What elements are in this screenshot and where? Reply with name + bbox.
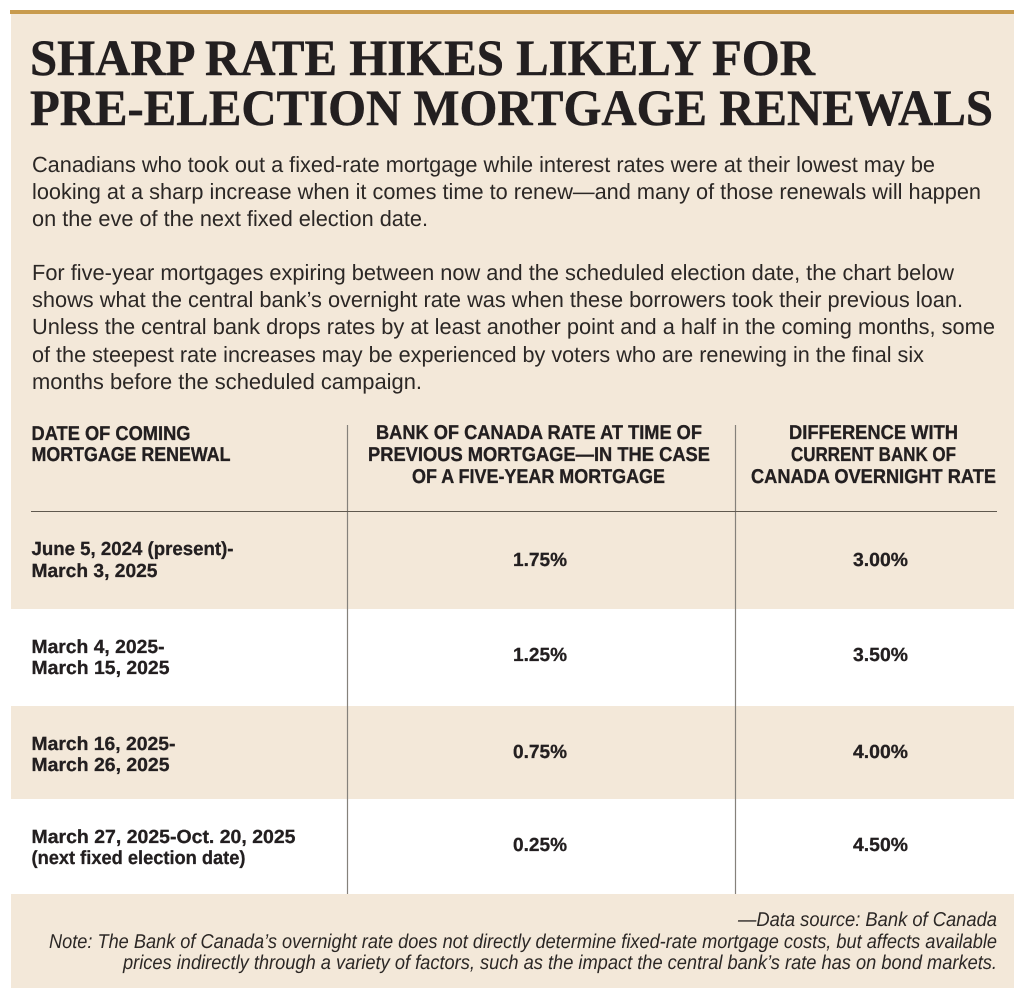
row 1	[32, 539, 908, 582]
text block: intro paragraph: on the eve of the next fixed election date.	[32, 206, 428, 231]
title: SHARP RATE HIKES LIKELY FOR	[30, 31, 816, 87]
footer: source and note	[49, 909, 997, 974]
column heading: renewal date: MORTGAGE RENEWAL	[32, 444, 230, 466]
row 4: (next fixed election date)	[32, 848, 246, 869]
text block: explanatory paragraph: Unless the central bank drops rates by at least another point and a half in the coming months, some	[32, 314, 995, 339]
column heading: previous rate: OF A FIVE-YEAR MORTGAGE	[412, 466, 665, 488]
row 4	[32, 827, 908, 869]
column heading: rate difference: DIFFERENCE WITH	[789, 422, 958, 444]
row 3	[32, 734, 908, 776]
panel: third row background	[11, 706, 1014, 799]
row 3: 0.75%	[513, 742, 567, 763]
text block: explanatory paragraph	[32, 260, 995, 394]
panel: header and first row background	[11, 14, 1014, 609]
row 4: March 27, 2025-Oct. 20, 2025	[32, 827, 296, 848]
row 2: 3.50%	[853, 645, 908, 666]
top accent bar	[10, 10, 1014, 14]
row 1: June 5, 2024 (present)-	[32, 539, 234, 560]
column heading: previous rate: BANK OF CANADA RATE AT TIME OF	[376, 422, 702, 444]
text block: intro paragraph	[32, 152, 981, 231]
row 2: March 15, 2025	[32, 658, 170, 679]
text block: explanatory paragraph: months before the scheduled campaign.	[32, 369, 422, 394]
row 3: 4.00%	[853, 742, 908, 763]
row 3: March 26, 2025	[32, 755, 170, 776]
row 3: March 16, 2025-	[32, 734, 176, 755]
row 2	[32, 637, 908, 679]
text block: explanatory paragraph: of the steepest rate increases may be experienced by voters who are renewing in the final six	[32, 342, 924, 367]
text block: intro paragraph: looking at a sharp increase when it comes time to renew—and many of those renewals will happen	[32, 179, 981, 204]
title: PRE-ELECTION MORTGAGE RENEWALS	[30, 81, 993, 137]
column heading: previous rate: PREVIOUS MORTGAGE—IN THE CASE	[368, 444, 710, 466]
row 1: March 3, 2025	[32, 561, 158, 582]
row 2: 1.25%	[513, 645, 567, 666]
column heading: rate difference: CANADA OVERNIGHT RATE	[751, 466, 996, 488]
row 1: 3.00%	[853, 550, 908, 571]
column heading: rate difference	[751, 422, 996, 488]
column heading: previous rate	[368, 422, 710, 488]
title	[30, 31, 993, 137]
footer: source and note: —Data source: Bank of Canada	[737, 909, 997, 931]
row 2: March 4, 2025-	[32, 637, 164, 658]
column heading: rate difference: CURRENT BANK OF	[791, 444, 956, 466]
text block: intro paragraph: Canadians who took out a fixed-rate mortgage while interest rates were at their lowest may be	[32, 152, 935, 177]
panel: footer background	[11, 894, 1014, 988]
row 4: 4.50%	[853, 835, 908, 856]
row 4: 0.25%	[513, 835, 567, 856]
text block: explanatory paragraph: shows what the central bank’s overnight rate was when these borrowers took their previous loan.	[32, 287, 963, 312]
column heading: renewal date: DATE OF COMING	[32, 423, 190, 445]
row 1: 1.75%	[513, 550, 567, 571]
table rules	[31, 425, 997, 894]
column heading: renewal date	[32, 423, 230, 466]
text block: explanatory paragraph: For five-year mortgages expiring between now and the scheduled election date, the chart below	[32, 260, 954, 285]
